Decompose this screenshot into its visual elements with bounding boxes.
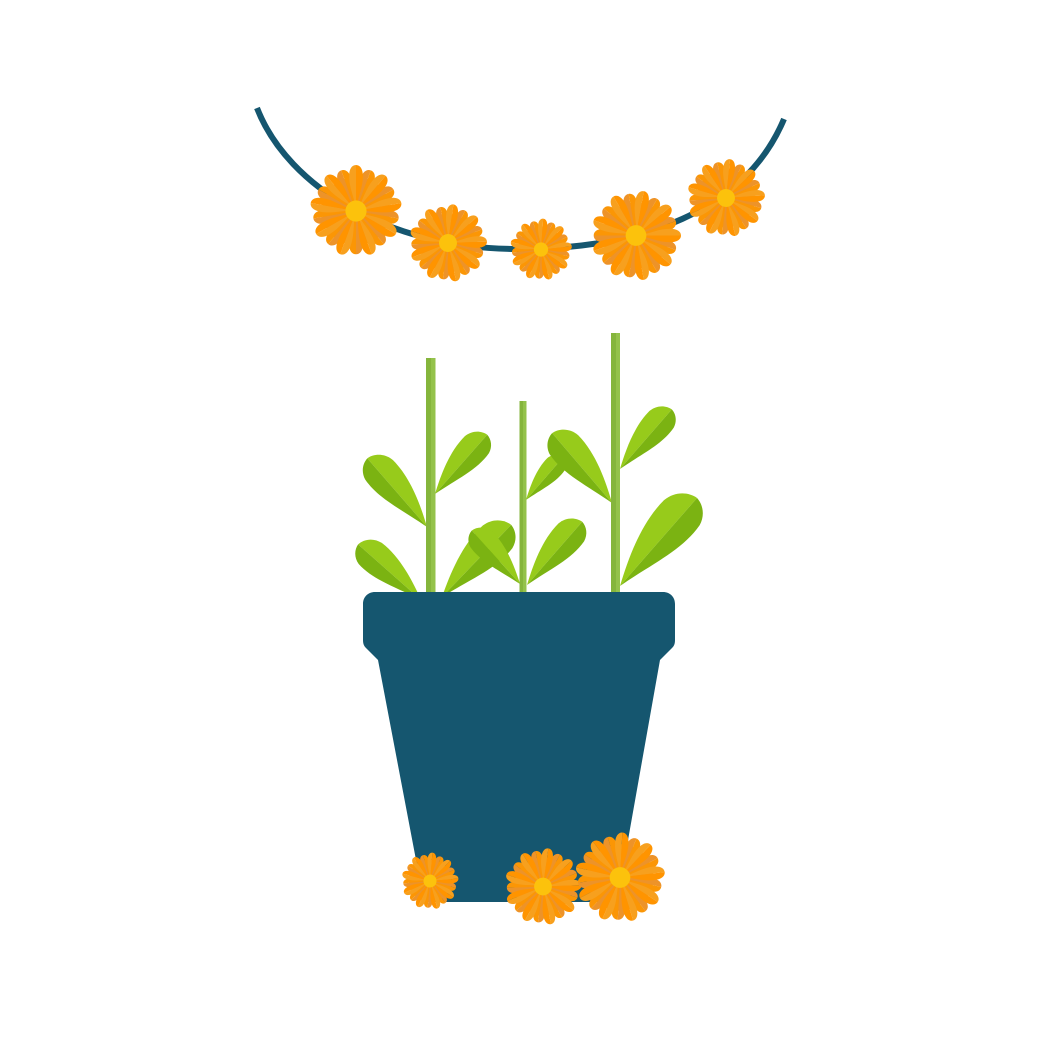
leaf: centre upper right xyxy=(517,449,571,507)
flower 1 xyxy=(310,165,402,257)
flower pot xyxy=(363,592,675,902)
flower 2 xyxy=(404,199,492,287)
leaf: right stem upper left xyxy=(540,421,626,513)
leaf: lower centre large xyxy=(427,511,524,609)
leaf: centre lower left xyxy=(462,521,531,592)
leaf: lower left xyxy=(348,532,432,611)
flower 3 xyxy=(508,216,574,282)
stem: centre xyxy=(520,401,526,592)
garland string xyxy=(257,108,784,249)
ground flower small xyxy=(399,850,461,912)
leaf: right stem upper right xyxy=(608,399,682,478)
leaf: left stem upper right xyxy=(423,424,498,503)
ground flower large xyxy=(572,830,668,924)
ground flower medium xyxy=(499,843,587,930)
leaf: centre lower right xyxy=(514,511,593,595)
plant leaves and stems xyxy=(348,333,712,611)
stem: left xyxy=(426,358,436,594)
garland flowers xyxy=(310,155,769,287)
flower 5 xyxy=(683,155,769,241)
flower 4 xyxy=(583,183,689,287)
stem: right xyxy=(611,333,620,594)
leaf: right stem lower xyxy=(602,482,712,599)
ground flowers xyxy=(399,830,668,930)
leaf: left stem upper left xyxy=(355,446,441,537)
